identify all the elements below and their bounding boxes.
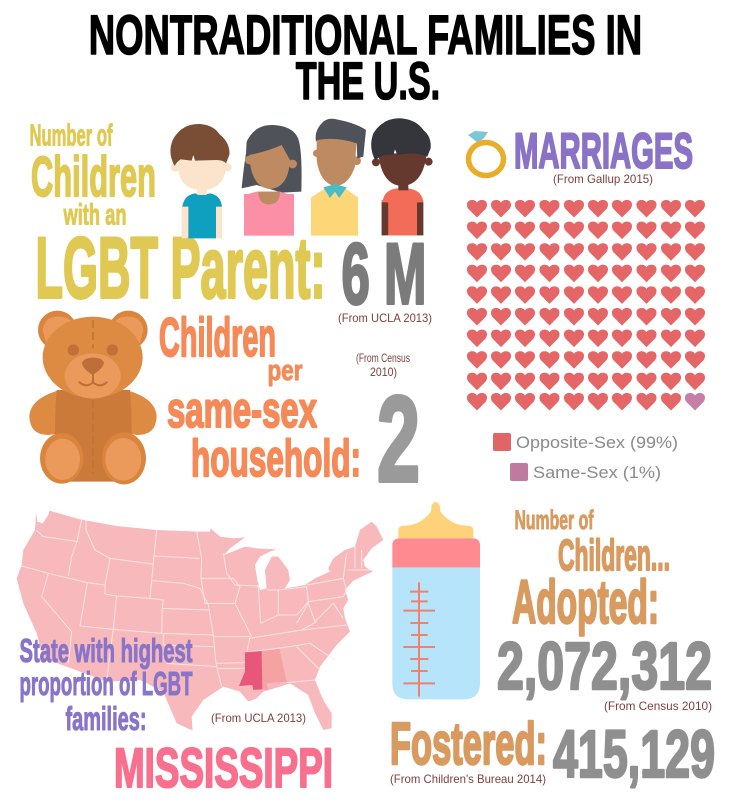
heading: number of children adopted: Number of xyxy=(514,505,594,535)
source: UCLA 2013: (From UCLA 2013) xyxy=(211,711,306,725)
title: THE U.S. xyxy=(296,52,440,111)
heading: children per same-sex household: same-sex xyxy=(167,382,317,438)
panel: children with an LGBT parent xyxy=(30,118,433,325)
heading: state with highest proportion: State with highest xyxy=(20,632,193,669)
heading: state with highest proportion xyxy=(20,632,193,737)
heading: fostered: Fostered: xyxy=(390,711,547,777)
source: UCLA 2013: (From UCLA 2013) xyxy=(338,311,432,325)
heading: children per same-sex household: household: xyxy=(191,430,361,488)
state: Alabama xyxy=(262,649,287,690)
heading: number of children with an LGBT parent: Number of xyxy=(30,118,113,152)
stat: 6 M: 6 M xyxy=(342,226,426,322)
icon: child four xyxy=(371,118,433,235)
source: gallup 2015: (From Gallup 2015) xyxy=(553,172,653,186)
icon: ring xyxy=(468,131,504,176)
icon: four children xyxy=(170,118,433,238)
heading: children per same-sex household xyxy=(159,306,361,488)
icon: baby bottle xyxy=(392,502,480,699)
legend xyxy=(493,433,678,482)
state: Mississippi xyxy=(239,651,262,690)
heading: number of children with an LGBT parent: with an xyxy=(63,198,126,232)
icon: teddy bear xyxy=(29,311,157,484)
panel: adopted and fostered xyxy=(390,502,715,792)
source: census 2010 xyxy=(356,351,410,379)
panel: map of LGBT families by state xyxy=(17,511,383,799)
panel: children per same-sex household xyxy=(29,306,420,507)
icon: child two xyxy=(242,125,302,236)
legend: Same-Sex (1%) xyxy=(533,464,661,482)
heading: number of children with an LGBT parent: LGBT Parent: xyxy=(36,220,326,316)
source: census 2010: (From Census xyxy=(356,351,410,365)
source: children's bureau 2014: (From Children's Bureau 2014) xyxy=(390,772,546,786)
stat: 2: 2 xyxy=(377,371,420,507)
panel: marriages xyxy=(467,123,705,482)
source: census 2010: (From Census 2010) xyxy=(604,699,712,713)
heading: children per same-sex household: Children xyxy=(159,306,276,368)
chart: hearts pictogram xyxy=(467,200,705,410)
stat: Mississippi: MISSISSIPPI xyxy=(114,736,333,799)
heading: state with highest proportion: proportion of LGBT xyxy=(20,665,192,702)
icon: child three xyxy=(311,119,366,236)
heading: number of children with an LGBT parent xyxy=(30,118,326,316)
heading: children per same-sex household: per xyxy=(268,355,302,387)
map: United States xyxy=(17,511,383,731)
heading: state with highest proportion: families: xyxy=(66,700,146,737)
title xyxy=(89,3,642,111)
heading: number of children with an LGBT parent: Children xyxy=(31,145,156,209)
icon: child one xyxy=(170,124,232,238)
source: census 2010: 2010) xyxy=(370,365,397,379)
heading: number of children adopted xyxy=(512,505,670,636)
legend: Opposite-Sex (99%) xyxy=(516,434,678,452)
